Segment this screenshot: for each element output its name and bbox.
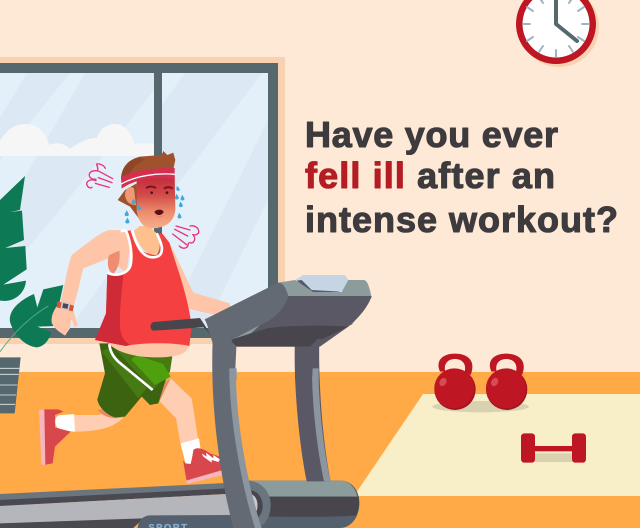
potted plant bbox=[0, 176, 63, 413]
headband bbox=[121, 168, 175, 189]
head bbox=[137, 177, 175, 228]
large leaf bbox=[0, 176, 27, 301]
ear bbox=[125, 187, 136, 205]
roller end bbox=[248, 481, 359, 528]
rear leg bbox=[58, 408, 123, 432]
armpit shade bbox=[108, 251, 120, 274]
dumbbell bbox=[521, 433, 586, 463]
console bbox=[205, 275, 372, 380]
kettlebells bbox=[432, 354, 529, 412]
sweat drops bbox=[125, 186, 184, 224]
belly skin bbox=[108, 343, 192, 357]
front leg bbox=[158, 378, 199, 450]
treadmill bbox=[0, 275, 372, 528]
small leaf bbox=[10, 285, 63, 347]
headline: fell ill after an bbox=[305, 155, 555, 196]
far arm bbox=[168, 240, 230, 318]
legs and shoes bbox=[39, 343, 223, 484]
face bbox=[146, 186, 173, 189]
handle bar bbox=[150, 318, 210, 333]
near upright bbox=[212, 340, 262, 528]
headline bbox=[305, 114, 618, 240]
shirt bbox=[95, 231, 192, 346]
orange floor bbox=[0, 372, 640, 528]
hair back bbox=[118, 183, 140, 220]
breath puff left bbox=[87, 164, 113, 188]
clock bbox=[516, 0, 599, 67]
watch bbox=[57, 301, 74, 311]
shirt straps bbox=[107, 231, 131, 275]
rear shoe bbox=[43, 409, 71, 465]
plant pot bbox=[0, 357, 21, 413]
headline: Have you ever bbox=[305, 114, 558, 155]
exercise mat bbox=[354, 394, 640, 496]
runner bbox=[39, 151, 230, 484]
far upright bbox=[295, 340, 331, 481]
body and near arm bbox=[52, 151, 192, 357]
neck and chest skin bbox=[134, 226, 160, 255]
treadmill deck bbox=[0, 481, 359, 528]
shorts bbox=[97, 343, 175, 417]
front shoe bbox=[183, 448, 223, 482]
headline: intense workout? bbox=[305, 199, 618, 240]
near arm bbox=[60, 230, 132, 307]
hair top bbox=[121, 151, 175, 178]
cloud bbox=[0, 124, 154, 156]
breath puff right bbox=[173, 226, 199, 248]
window bbox=[0, 57, 285, 344]
hand bbox=[52, 304, 78, 336]
